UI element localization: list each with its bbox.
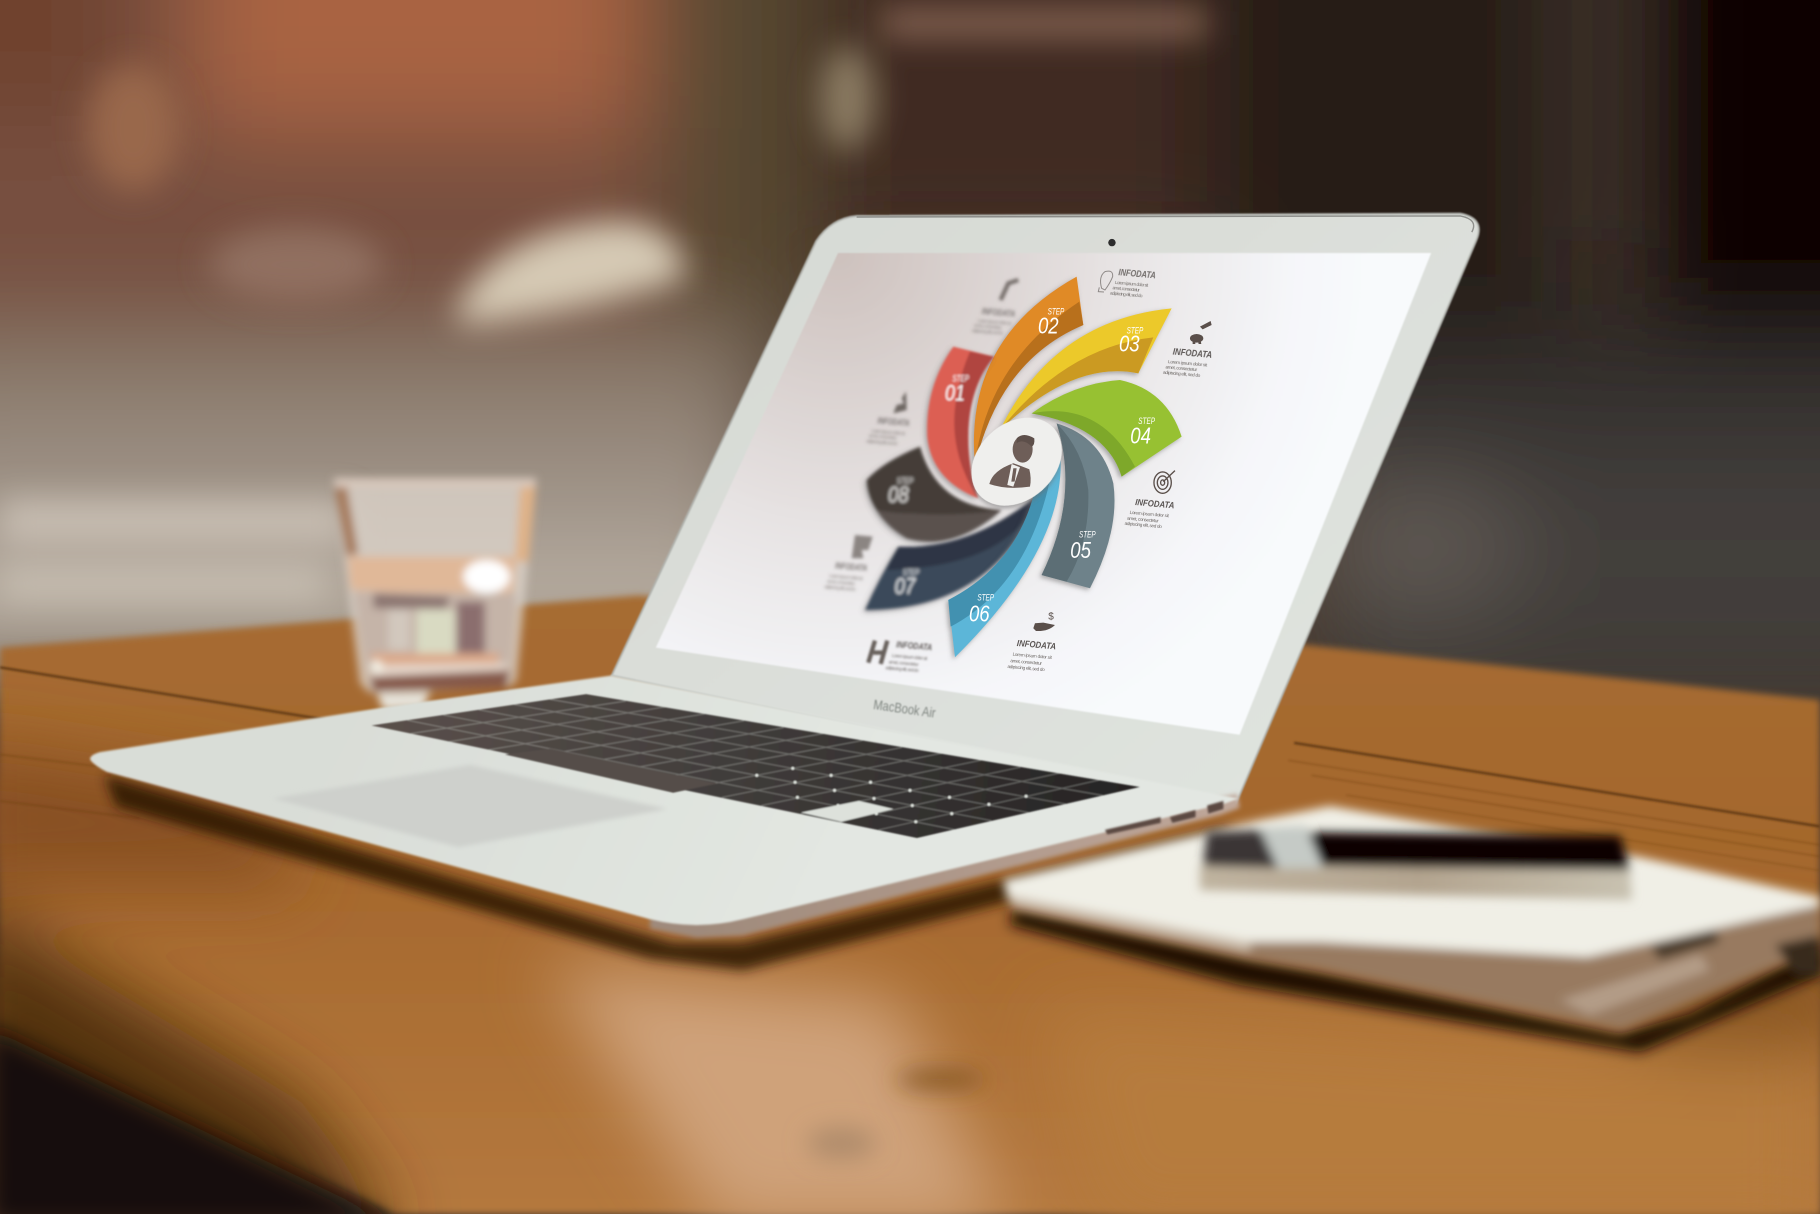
petal: step 08: 08 xyxy=(888,482,909,508)
petal: step 05 xyxy=(1042,423,1115,588)
petal: step 01: 01 xyxy=(945,381,965,406)
wooden table xyxy=(0,595,1820,1214)
info: piggy bank xyxy=(1163,321,1213,379)
info: piggy bank: INFODATA xyxy=(1172,346,1213,360)
info: blurred wrench label: INFODATA xyxy=(981,306,1016,319)
infographic on screen xyxy=(824,266,1213,674)
laptop xyxy=(90,214,1479,938)
info: top right lightbulb: INFODATA xyxy=(1118,267,1156,280)
petal: step 07: STEP xyxy=(903,568,920,578)
notebook with phone xyxy=(1003,806,1820,1052)
info: blurred chart label: adipiscing elit, sed do xyxy=(866,438,898,446)
notebook straps xyxy=(1650,930,1720,960)
petal: step 01 xyxy=(927,347,994,498)
info: blurred chart label xyxy=(866,392,910,447)
info: top right lightbulb: amet, consectetur xyxy=(1112,285,1140,293)
petal: step 07: 07 xyxy=(895,573,916,599)
petal: step 08 xyxy=(867,447,1002,542)
phone xyxy=(1200,826,1632,900)
petal: step 02 xyxy=(974,277,1083,465)
laptop shadow on table xyxy=(104,775,1230,970)
info: target: INFODATA xyxy=(1135,497,1175,510)
info: target: adipiscing elit, sed do xyxy=(1124,521,1162,529)
info: blurred chart label: amet, consectetur xyxy=(869,433,897,440)
petal: step 02: 02 xyxy=(1038,312,1059,338)
info: blurred monitor label xyxy=(824,535,873,593)
info: top right lightbulb xyxy=(1098,266,1156,299)
screen xyxy=(656,253,1431,735)
info: blurred monitor label: adipiscing elit, sed do xyxy=(824,584,856,592)
petal: step 04: 04 xyxy=(1130,422,1151,448)
info: hand and dollar: adipiscing elit, sed do xyxy=(1007,664,1045,672)
info: blurred monitor label: amet, consectetur xyxy=(827,579,856,586)
petal: step 01: STEP xyxy=(952,374,970,384)
trackpad xyxy=(273,765,667,847)
petal: step 06: STEP xyxy=(977,593,995,603)
petal: step 05: STEP xyxy=(1079,529,1096,539)
center disc with person icon xyxy=(954,400,1079,524)
petal: step 03 xyxy=(1000,308,1172,430)
info: target: amet, consectetur xyxy=(1127,516,1159,523)
info: top right lightbulb: adipiscing elit, sed do xyxy=(1110,290,1143,298)
petal: step 05: 05 xyxy=(1070,537,1091,563)
notebook cover edge xyxy=(1005,893,1820,1030)
info: blurred monitor label: Lorem ipsum dolor sit xyxy=(829,573,863,581)
petal: step 03: 03 xyxy=(1119,330,1140,356)
info: blurred monitor label: INFODATA xyxy=(835,560,868,573)
info: top right lightbulb: Lorem ipsum dolor sit xyxy=(1115,280,1149,288)
info: target xyxy=(1124,471,1175,530)
petal: step 04 xyxy=(1032,380,1182,477)
info: piggy bank: amet, consectetur xyxy=(1165,364,1198,372)
key glints xyxy=(755,767,1028,823)
petal: step 03: STEP xyxy=(1127,325,1144,335)
ports xyxy=(1105,801,1223,835)
info: piggy bank: adipiscing elit, sed do xyxy=(1163,370,1201,378)
info: target: Lorem ipsum dolor sit xyxy=(1129,510,1170,518)
petal: step 06 xyxy=(948,460,1061,657)
keyboard xyxy=(371,694,1140,838)
glass of water xyxy=(334,478,536,710)
petal: step 02: STEP xyxy=(1048,307,1065,317)
info: handshake figures xyxy=(868,639,933,674)
info: hand and dollar xyxy=(1007,611,1057,673)
petal: step 04: STEP xyxy=(1138,416,1155,426)
info: handshake figures: INFODATA xyxy=(896,639,933,652)
info: blurred wrench label: amet, consectetur xyxy=(974,323,1003,330)
info: hand and dollar: Lorem ipsum dolor sit xyxy=(1012,652,1053,660)
petal: step 08: STEP xyxy=(897,476,914,486)
info: blurred chart label: INFODATA xyxy=(877,415,910,428)
arrow key notch xyxy=(801,801,894,822)
info: blurred wrench label: adipiscing elit, sed do xyxy=(972,328,1004,336)
camera xyxy=(1108,239,1116,246)
petal: step 07 xyxy=(865,492,1042,610)
laptop base underside edge xyxy=(650,794,1240,938)
info: hand and dollar: amet, consectetur xyxy=(1010,658,1043,666)
info: blurred wrench label xyxy=(972,280,1018,336)
laptop lid xyxy=(612,214,1479,803)
info: hand and dollar: INFODATA xyxy=(1016,638,1057,651)
info: handshake figures: Lorem ipsum dolor sit xyxy=(892,653,928,661)
lid edge highlight xyxy=(857,216,1474,232)
info: hand and dollar: $ xyxy=(1048,611,1054,622)
info: handshake figures: amet, consectetur xyxy=(888,659,919,667)
notebook pages xyxy=(1003,806,1820,957)
info: piggy bank: Lorem ipsum dolor sit xyxy=(1168,359,1208,368)
laptop base xyxy=(90,676,1238,925)
notebook shadow xyxy=(1010,908,1820,1052)
brand label: MacBook Air xyxy=(872,696,937,721)
info: blurred wrench label: Lorem ipsum dolor sit xyxy=(978,318,1012,326)
space bar xyxy=(505,749,717,793)
info: handshake figures: adipiscing elit, sed do xyxy=(885,665,919,673)
info: blurred chart label: Lorem ipsum dolor sit xyxy=(871,428,906,436)
petal: step 06: 06 xyxy=(969,600,990,626)
